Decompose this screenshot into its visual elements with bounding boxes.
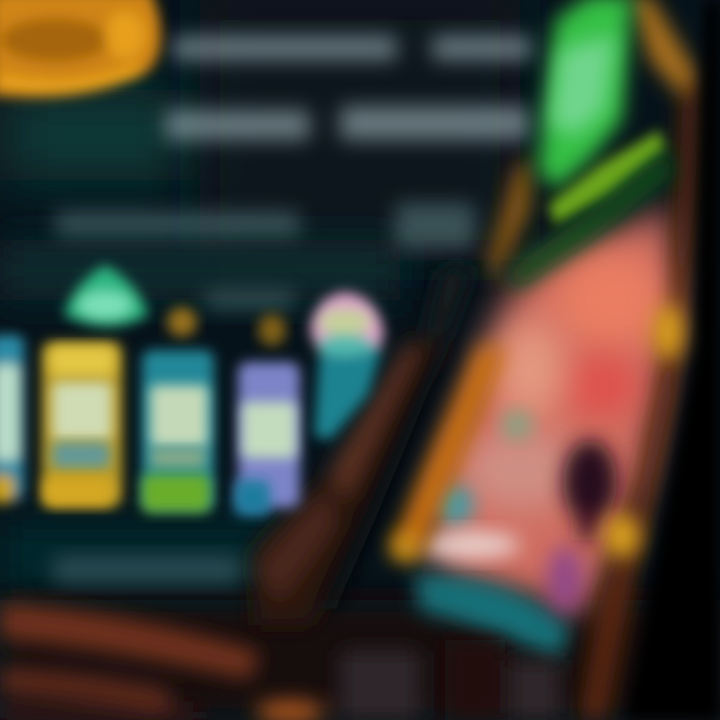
banner: green sign: [510, 0, 672, 290]
icon: small amber light: [167, 307, 197, 337]
text block: blurred subtitle: [55, 203, 475, 308]
icon: green dome lamp: [64, 265, 148, 326]
figure silhouette: [563, 440, 617, 540]
icon: second amber light: [258, 314, 286, 346]
slot machine: teal and green: [142, 350, 214, 512]
panel: right wall with pink mural: [415, 205, 680, 660]
text block: blurred caption: [52, 556, 242, 584]
panel: dark right edge: [625, 0, 720, 720]
slot machine: violet and blue: [234, 362, 300, 516]
icon: yellow lights on the wall: [393, 304, 683, 562]
icon: golden lamp: [0, 0, 161, 97]
slot machine: yellow: [42, 342, 122, 506]
slot machine: rainbow dome: [310, 292, 384, 440]
heading: blurred title lines: [165, 36, 532, 140]
frame: orange diagonal frame: [390, 0, 700, 720]
slot machine: far-left partial: [0, 335, 24, 503]
staircase: diagonal brown railing: [250, 265, 475, 625]
floor: red-brown bands: [0, 603, 560, 720]
